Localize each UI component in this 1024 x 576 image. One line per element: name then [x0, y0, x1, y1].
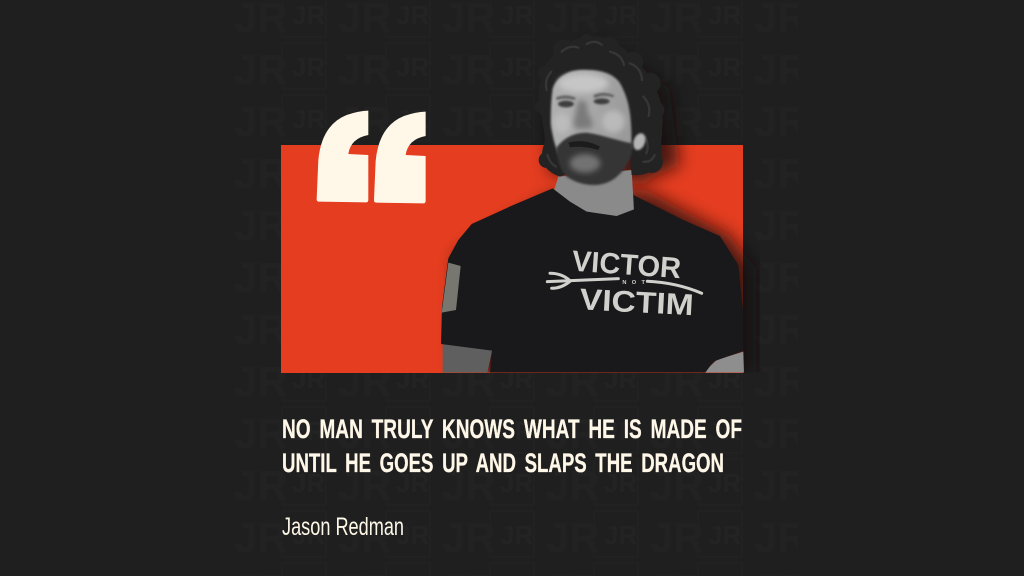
- person shadow: [456, 42, 756, 375]
- t-shirt: [441, 188, 743, 373]
- hair mass: [539, 35, 663, 177]
- hair highlights: [546, 42, 655, 167]
- beard grey patch: [570, 154, 600, 173]
- trident: [547, 273, 702, 293]
- left quote glyph: [317, 111, 368, 202]
- neck: [554, 170, 634, 217]
- shirt lettering: [546, 250, 704, 316]
- watermark pattern: [226, 0, 798, 576]
- ear: [632, 132, 647, 152]
- right forearm: [703, 352, 744, 373]
- beard: [556, 133, 633, 185]
- eyes: [556, 93, 614, 107]
- left forearm: [443, 343, 493, 373]
- nose shadow: [573, 100, 593, 129]
- face: [551, 70, 631, 153]
- hair curls: [553, 39, 574, 61]
- cheek highlights: [553, 113, 570, 133]
- word: VICTIM: VICTIM: [579, 283, 695, 322]
- forehead highlight: [558, 74, 608, 93]
- attribution: Jason Redman: [282, 513, 404, 541]
- right quote glyph: [374, 112, 426, 203]
- quote text: [282, 414, 742, 478]
- word: VICTOR: VICTOR: [571, 245, 682, 285]
- shoulder patch: [442, 263, 461, 313]
- word: NOT: NOT: [622, 280, 646, 286]
- quote line 2: UNTIL HE GOES UP AND SLAPS THE DRAGON: [282, 448, 724, 478]
- quote line 1: NO MAN TRULY KNOWS WHAT HE IS MADE OF: [282, 414, 742, 444]
- right cheek: [602, 110, 625, 133]
- red panel: [281, 145, 743, 373]
- mouth: [568, 141, 600, 150]
- hair: [535, 34, 664, 177]
- quotation mark: [317, 111, 426, 203]
- person photo: [441, 34, 756, 375]
